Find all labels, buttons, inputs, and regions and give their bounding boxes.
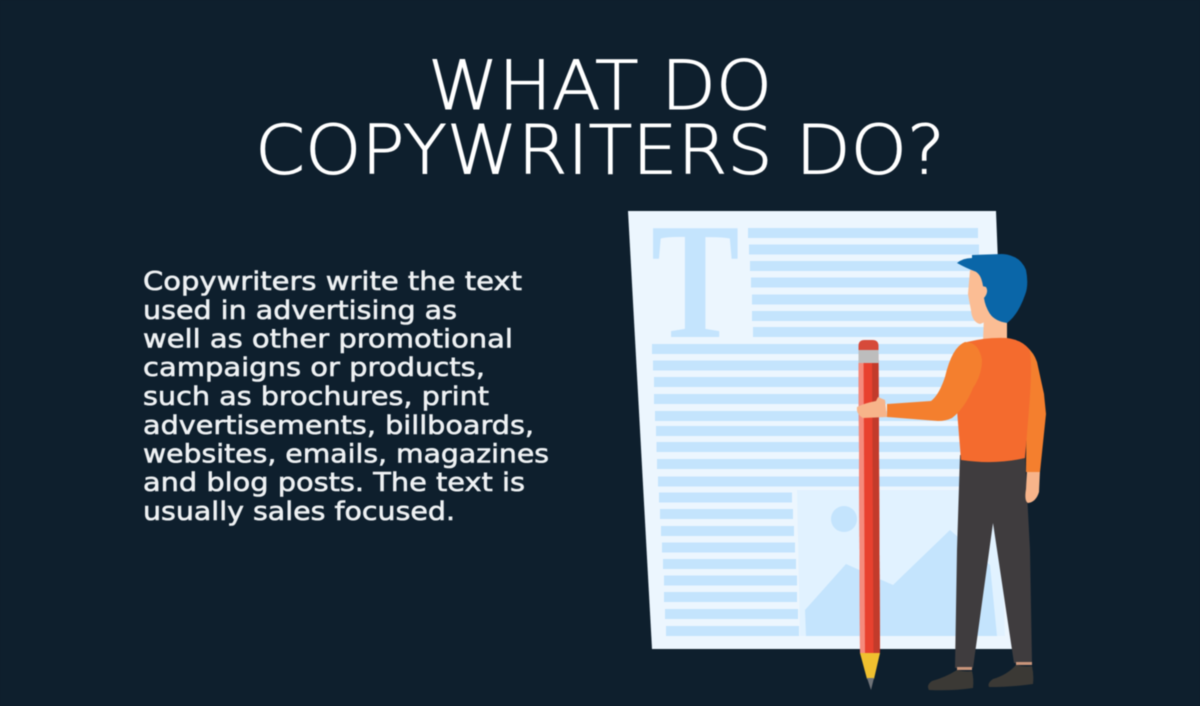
shoes <box>928 670 973 690</box>
face <box>968 270 990 324</box>
holding hand <box>857 397 887 418</box>
body text block: such as brochures, print <box>143 382 489 412</box>
torso <box>952 338 1031 462</box>
body text block <box>143 267 549 527</box>
letter T icon: T <box>651 189 740 373</box>
trousers <box>955 455 1032 668</box>
body text block: campaigns or products, <box>143 353 485 383</box>
illustration: person <box>857 254 1046 690</box>
near hand <box>1025 470 1040 503</box>
illustration: pencil <box>858 340 880 690</box>
body text block: usually sales focused. <box>143 497 455 527</box>
far arm <box>887 342 982 421</box>
full width text lines <box>652 344 994 486</box>
near arm <box>1026 347 1046 472</box>
image placeholder <box>797 490 1005 636</box>
body text block: well as other promotional <box>143 324 513 354</box>
title: COPYWRITERS DO? <box>255 112 945 190</box>
illustration: document page <box>628 189 1013 649</box>
title <box>255 47 945 190</box>
short text lines <box>659 492 799 636</box>
title: WHAT DO <box>428 47 772 126</box>
page sheet <box>628 211 1013 649</box>
body text block: advertisements, billboards, <box>143 411 534 441</box>
text lines beside T <box>748 228 986 337</box>
ankles <box>957 662 1032 670</box>
hair <box>957 254 1027 323</box>
body text block: and blog posts. The text is <box>143 468 525 498</box>
body text block: used in advertising as <box>143 296 457 326</box>
body text block: websites, emails, magazines <box>143 440 549 470</box>
neck <box>983 315 1007 342</box>
body text block: Copywriters write the text <box>143 267 522 297</box>
